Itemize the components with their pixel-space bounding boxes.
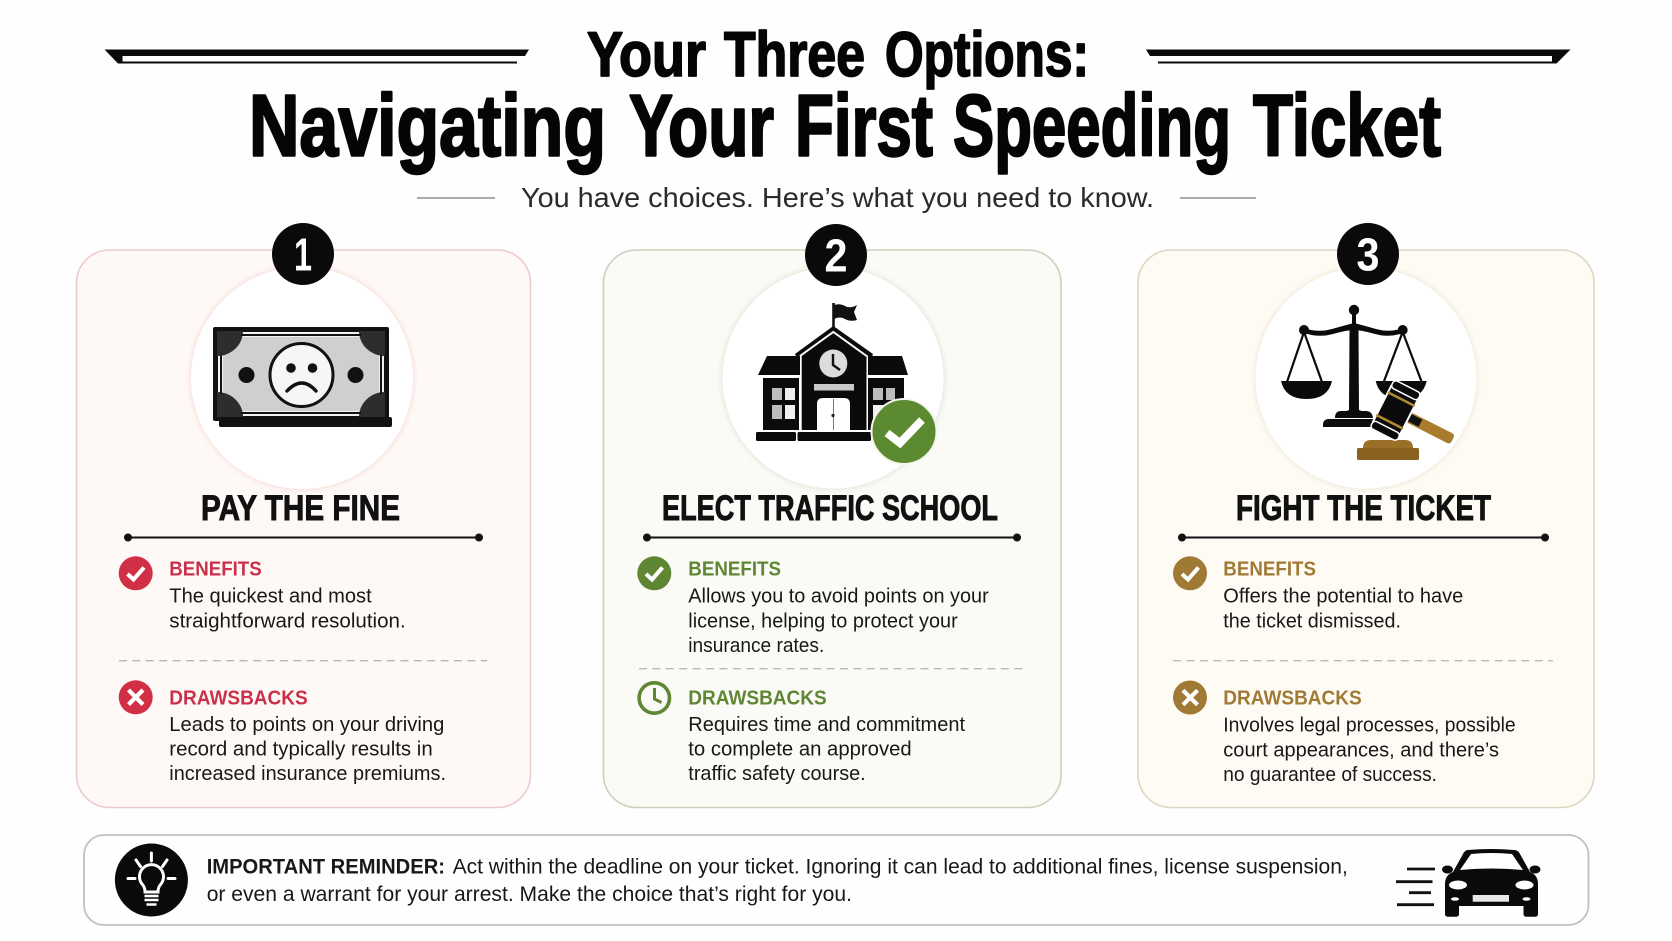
benefits text bbox=[169, 585, 406, 632]
icon: gavel bbox=[1357, 380, 1465, 464]
title line two bbox=[249, 78, 1441, 175]
drawbacks bbox=[1173, 680, 1516, 786]
callout: important reminder bbox=[84, 835, 1588, 925]
benefits bbox=[637, 556, 989, 657]
drawbacks text: traffic safety course. bbox=[688, 762, 866, 785]
number badge 3 bbox=[1337, 223, 1399, 285]
card background bbox=[1138, 250, 1594, 808]
icon: clock bbox=[639, 683, 670, 713]
drawbacks bbox=[119, 680, 446, 785]
heading rule bbox=[643, 534, 1021, 542]
benefits bbox=[1173, 556, 1463, 632]
reminder text bbox=[207, 854, 1348, 906]
icon: light bulb bbox=[115, 844, 188, 916]
icon: check bbox=[1173, 556, 1207, 590]
number badge 2 bbox=[805, 224, 867, 286]
left title rule bbox=[104, 50, 529, 64]
benefits text: insurance rates. bbox=[688, 634, 824, 657]
panel: pay the fine bbox=[76, 223, 530, 808]
benefits text: Allows you to avoid points on your bbox=[688, 585, 989, 608]
card background bbox=[604, 250, 1061, 808]
icon circle bbox=[722, 268, 944, 488]
icon: cross bbox=[1173, 680, 1207, 714]
title line one bbox=[587, 20, 1089, 90]
icon: cross bbox=[119, 680, 153, 714]
drawbacks label: DRAWSBACKS bbox=[1223, 688, 1362, 710]
benefits text: Offers the potential to have bbox=[1223, 585, 1463, 608]
title line two: Ticket bbox=[1253, 78, 1441, 175]
benefits text: straightforward resolution. bbox=[169, 609, 406, 632]
heading rule bbox=[1178, 534, 1549, 542]
drawbacks text: court appearances, and there’s bbox=[1223, 738, 1499, 762]
heading: FIGHT THE TICKET bbox=[1236, 489, 1491, 528]
panel: fight the ticket bbox=[1138, 223, 1594, 808]
benefits text: the ticket dismissed. bbox=[1223, 609, 1401, 632]
drawbacks text: record and typically results in bbox=[169, 738, 433, 761]
right title rule bbox=[1146, 50, 1570, 64]
title line two: Your bbox=[629, 78, 774, 175]
number badge 1: 1 bbox=[294, 228, 312, 280]
subtitle: You have choices. Here’s what you need to know. bbox=[521, 182, 1154, 213]
title line two: Speeding bbox=[953, 78, 1231, 175]
drawbacks text bbox=[688, 713, 965, 785]
heading: ELECT TRAFFIC SCHOOL bbox=[662, 489, 998, 528]
title line one: Three bbox=[724, 20, 865, 90]
number badge 2: 2 bbox=[824, 230, 848, 282]
title line one: Options: bbox=[885, 20, 1089, 90]
heading rule bbox=[124, 534, 483, 542]
icon circle bbox=[1256, 268, 1476, 488]
icon: green check badge bbox=[872, 399, 936, 464]
number badge 3: 3 bbox=[1356, 228, 1380, 280]
drawbacks text bbox=[169, 713, 446, 785]
icon circle bbox=[191, 267, 413, 489]
reminder text: IMPORTANT REMINDER: bbox=[207, 854, 445, 878]
benefits label: BENEFITS bbox=[169, 559, 262, 581]
drawbacks text: Requires time and commitment bbox=[688, 713, 965, 736]
benefits label: BENEFITS bbox=[1223, 559, 1316, 581]
benefits text bbox=[688, 585, 989, 657]
benefits bbox=[119, 556, 406, 632]
drawbacks text: Involves legal processes, possible bbox=[1223, 714, 1516, 737]
number badge 1 bbox=[272, 223, 334, 285]
reminder text: Act within the deadline on your ticket. Ignoring it can lead to additional fines, license suspension, bbox=[453, 854, 1348, 878]
panel: elect traffic school bbox=[604, 224, 1061, 808]
title line one: Your bbox=[587, 20, 706, 90]
drawbacks bbox=[639, 683, 965, 785]
reminder box bbox=[84, 835, 1588, 925]
drawbacks label: DRAWSBACKS bbox=[688, 687, 827, 709]
icon: speeding car bbox=[1396, 849, 1540, 917]
benefits text: license, helping to protect your bbox=[688, 609, 958, 632]
drawbacks text: no guarantee of success. bbox=[1223, 763, 1437, 786]
icon: school building bbox=[756, 303, 908, 441]
title line two: First bbox=[795, 78, 933, 175]
icon: scales of justice bbox=[1281, 305, 1427, 427]
drawbacks text: to complete an approved bbox=[688, 738, 912, 761]
heading: PAY THE FINE bbox=[201, 489, 400, 528]
reminder text: or even a warrant for your arrest. Make the choice that’s right for you. bbox=[207, 882, 852, 906]
drawbacks label: DRAWSBACKS bbox=[169, 687, 308, 709]
benefits text: The quickest and most bbox=[169, 585, 372, 608]
drawbacks text bbox=[1223, 714, 1516, 786]
benefits text bbox=[1223, 585, 1463, 632]
card background bbox=[76, 250, 530, 808]
drawbacks text: increased insurance premiums. bbox=[169, 762, 446, 785]
icon: banknote with sad face bbox=[213, 327, 392, 427]
benefits label: BENEFITS bbox=[688, 559, 781, 581]
icon: check bbox=[637, 556, 671, 590]
icon: check bbox=[119, 556, 153, 590]
drawbacks text: Leads to points on your driving bbox=[169, 713, 444, 736]
title line two: Navigating bbox=[249, 78, 606, 175]
header bbox=[104, 20, 1570, 213]
